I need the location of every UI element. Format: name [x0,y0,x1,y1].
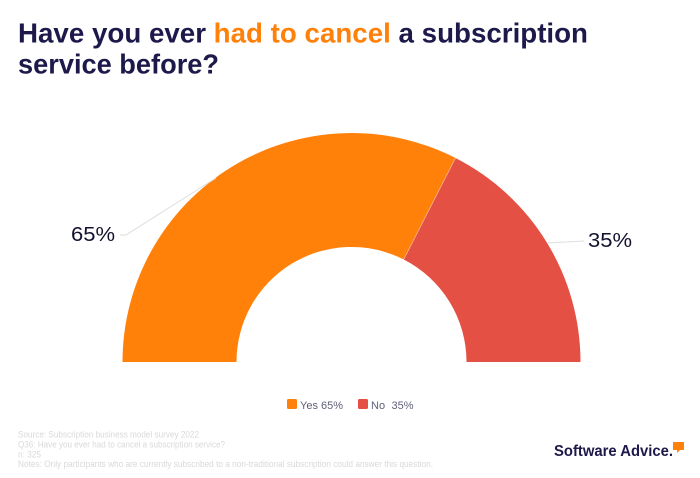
logo: Software Advice: Software Advice. [554,443,673,460]
source notes: n: 325 [18,450,41,460]
title [18,18,588,80]
slice: Yes 65% [122,133,456,362]
source notes: Notes: Only participants who are currently subscribed to a non-traditional subscription could answer this question. [18,459,433,469]
source notes [18,430,433,469]
label: 65%: 65% [71,223,115,246]
label: 35%: 35% [588,229,632,252]
legend item: No: No [371,400,385,412]
legend item: Yes: Yes [300,400,318,412]
icon: speech bubble [673,442,684,453]
leader line: 65% [120,178,216,235]
legend item: No: 35% [392,400,414,412]
title: Have you ever had to cancel a subscription [18,18,588,48]
legend item: No [358,399,414,412]
title: service before? [18,48,219,80]
source notes: Source: Subscription business model survey 2022 [18,430,199,440]
slice: No 35% [404,158,580,362]
legend item: Yes [287,399,343,412]
leader line: 35% [548,241,584,243]
legend [287,399,414,412]
source notes: Q36: Have you ever had to cancel a subscription service? [18,440,225,450]
legend item: Yes: 65% [321,400,343,412]
slice separator [404,158,456,260]
semi-donut chart [122,133,580,362]
